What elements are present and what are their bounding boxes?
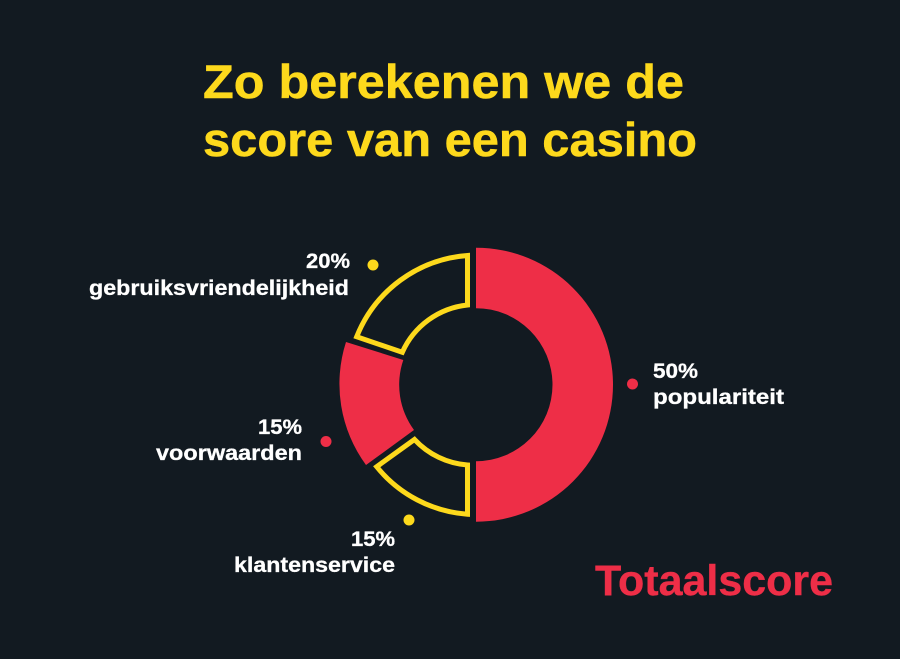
label text: 15% <box>351 528 395 551</box>
dot <box>368 260 378 270</box>
donut chart <box>339 248 613 522</box>
dot <box>627 378 638 390</box>
dot <box>320 436 332 447</box>
label text: voorwaarden <box>156 442 302 465</box>
label text: gebruiksvriendelijkheid <box>89 277 349 300</box>
label text: populariteit <box>653 386 784 409</box>
segment: usability 20% <box>357 256 468 352</box>
total score: Totaalscore <box>595 557 833 605</box>
label: conditions <box>156 416 332 465</box>
label text: klantenservice <box>234 554 395 577</box>
label text: 50% <box>653 360 698 383</box>
label: popularity <box>627 360 784 409</box>
label text <box>156 416 302 465</box>
segment: conditions 15% <box>339 342 414 465</box>
segment: customer service 15% <box>377 440 468 514</box>
label: customer service <box>234 514 414 577</box>
label text <box>89 250 350 300</box>
title <box>203 55 697 166</box>
label: usability <box>89 250 378 300</box>
segment: popularity 50% <box>476 248 613 522</box>
label text <box>653 360 784 409</box>
dot <box>404 514 414 526</box>
label text: 15% <box>258 416 302 439</box>
label text <box>234 528 395 577</box>
title: Zo berekenen we de <box>203 55 684 108</box>
title: score van een casino <box>203 113 697 166</box>
label text: 20% <box>306 250 350 273</box>
